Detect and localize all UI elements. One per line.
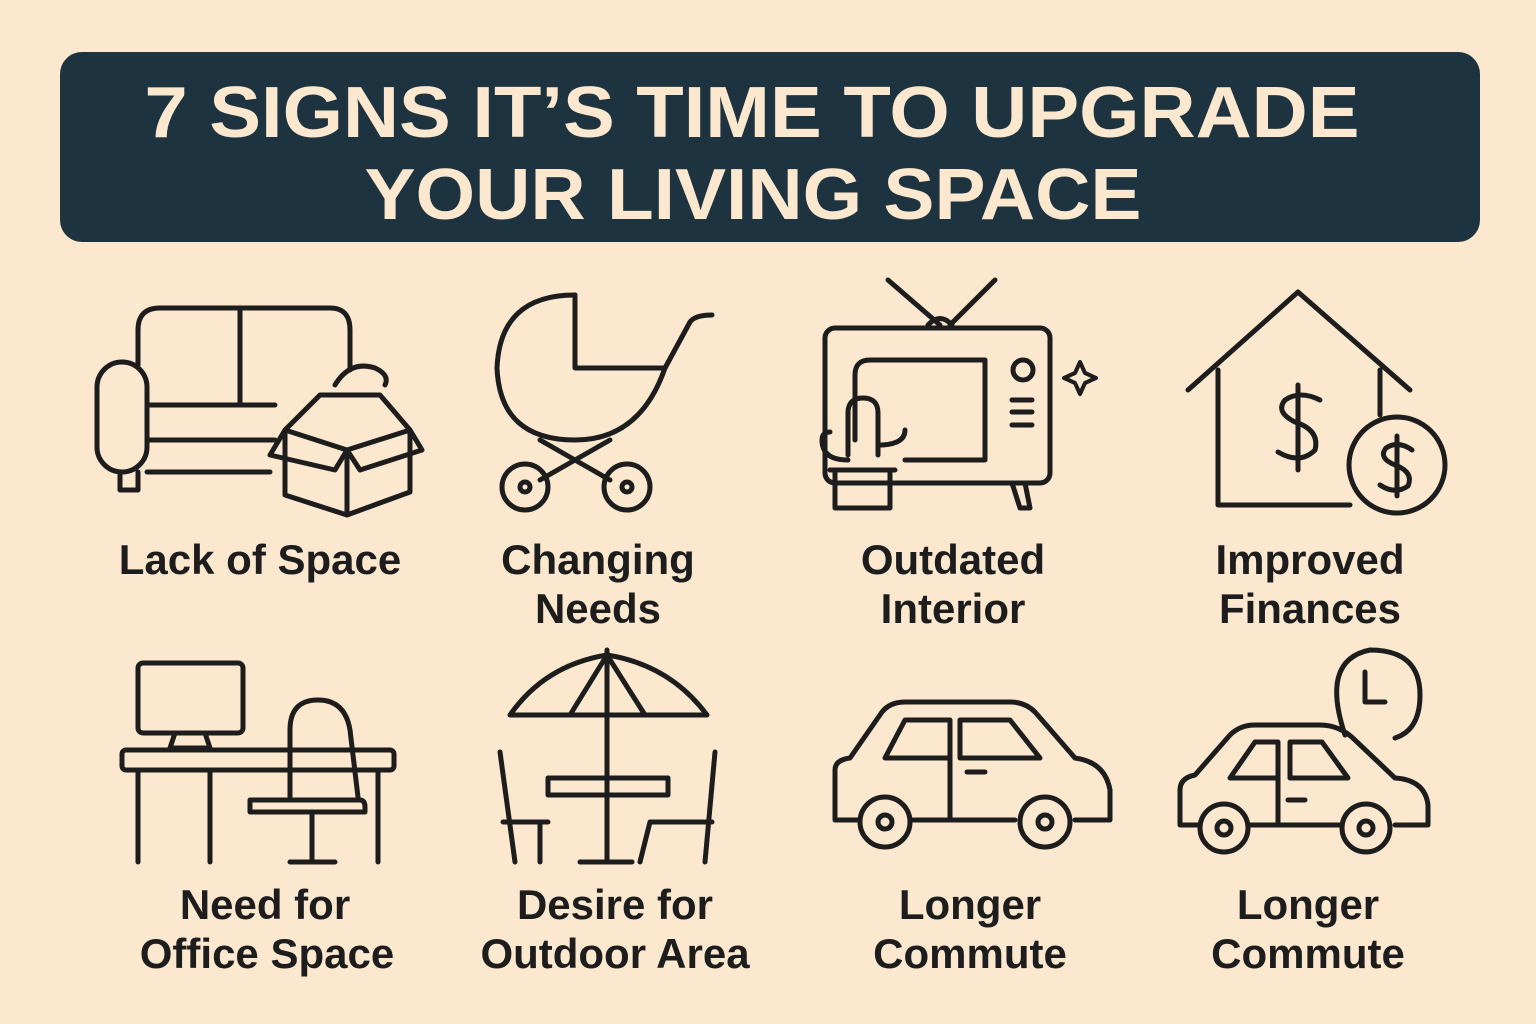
labels: Interior xyxy=(881,585,1025,632)
labels: Changing xyxy=(501,536,695,583)
icon: tv and cactus xyxy=(822,280,1096,508)
icon: car with clock xyxy=(1180,650,1428,852)
icon: patio umbrella xyxy=(500,650,715,862)
icon: office desk xyxy=(122,663,394,862)
icon: sofa and box xyxy=(97,308,422,515)
labels: Outdated xyxy=(861,536,1045,583)
labels: Finances xyxy=(1219,585,1401,632)
title xyxy=(60,52,1480,242)
labels: Improved xyxy=(1215,536,1405,583)
icon: car xyxy=(835,702,1110,847)
labels: Longer xyxy=(1237,881,1379,928)
labels: Commute xyxy=(1211,930,1405,977)
labels xyxy=(119,536,1405,977)
labels: Commute xyxy=(873,930,1067,977)
labels: Outdoor Area xyxy=(480,930,750,977)
title: YOUR LIVING SPACE xyxy=(364,155,1142,235)
labels: Needs xyxy=(535,585,661,632)
labels: Lack of Space xyxy=(119,536,401,583)
title: 7 SIGNS IT’S TIME TO UPGRADE xyxy=(144,73,1360,153)
labels: Desire for xyxy=(517,881,713,928)
icon: stroller xyxy=(497,295,712,510)
labels: Office Space xyxy=(140,930,394,977)
labels: Need for xyxy=(180,881,350,928)
icon: house with dollar xyxy=(1188,292,1445,513)
labels: Longer xyxy=(899,881,1041,928)
